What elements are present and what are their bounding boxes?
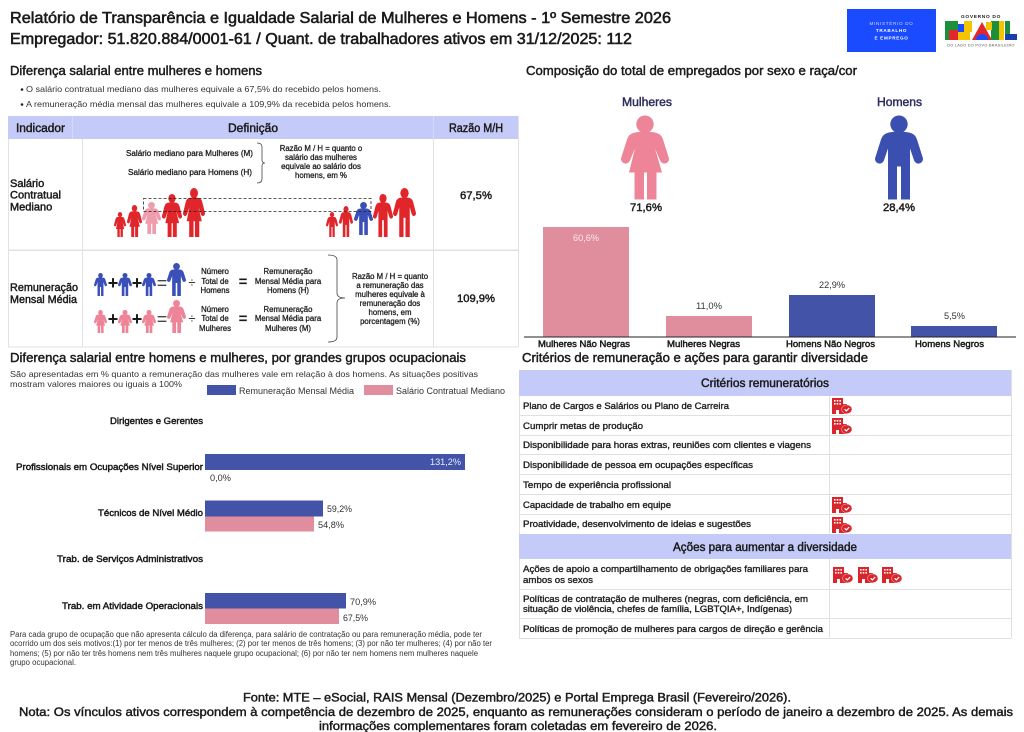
header: remuneration criteria: Critérios remuneratórios (701, 378, 829, 390)
formula: women average: Mensal Média para (255, 314, 322, 323)
brace and average ratio definition: remuneração dos (360, 299, 420, 308)
occupational groups explanation: São apresentadas em % quanto a remuneração das mulheres vale em relação à dos homens. As situações positivas (10, 369, 478, 379)
criteria rows: Disponibilidade de pessoa em ocupações específicas (523, 460, 754, 470)
value labels (210, 457, 462, 624)
men pictogram: Homens (877, 97, 922, 109)
bar: Mulheres Não Negras: 60,6% (573, 233, 600, 244)
table header: Definição (228, 123, 278, 135)
median salary definition text: Salário mediano para Homens (H) (128, 168, 252, 177)
value labels: 70,9% (350, 597, 377, 608)
bar: Mulheres Negras: 11,0% (696, 301, 723, 312)
median salary definition text (126, 143, 363, 183)
criteria rows: Plano de Cargos e Salários ou Plano de Carreira (523, 401, 729, 411)
heading: salary difference: Diferença salarial entre mulheres e homens (10, 64, 262, 78)
brace and average ratio definition: a remuneração das (356, 281, 424, 290)
heading: occupational groups: Diferença salarial entre homens e mulheres, por grandes grupos ocupacionais (10, 350, 467, 365)
formula: men average: ÷ (188, 275, 196, 290)
header: diversity actions: Ações para aumentar a diversidade (673, 542, 857, 554)
formula: men average: + (132, 273, 142, 293)
formula: men average: Total de (201, 277, 229, 286)
formula: women average: + (108, 309, 118, 329)
men pictogram: 28,4% (883, 202, 915, 214)
formula: men average: Mensal Média para (255, 277, 322, 286)
column chart: sex and race composition (524, 227, 1016, 349)
diversity action rows: situação de violência, chefes de família, LGBTQIA+, Indígenas) (523, 604, 792, 614)
dashed median connector (144, 198, 371, 212)
footer: source and note (19, 690, 1013, 732)
value: average ratio: 109,9% (457, 293, 495, 305)
footer: source and note: Nota: Os vínculos ativos correspondem à competência de dezembro de 2025, enquanto as remunerações consideram o período de janeiro a dezembro de 2025. As demais (19, 705, 1013, 719)
logo: Governo do Brasil: DO LADO DO POVO BRASILEIRO (947, 44, 1015, 48)
report title: Empregador: 51.820.884/0001-61 / Quant. de trabalhadores ativos em 31/12/2025: 112 (10, 31, 632, 48)
group labels (16, 416, 204, 611)
criteria rows: Proatividade, desenvolvimento de ideias e sugestões (523, 519, 752, 529)
footnote: missing data reasons: Para cada grupo de ocupação que não apresenta cálculo da diferença, para salário de contratação ou para remuneração média, pode ter (10, 630, 482, 639)
chart legend: Remuneração Mensal Média (239, 386, 354, 396)
criteria rows (523, 401, 812, 529)
panel: indicator table (8, 116, 519, 348)
logo: Governo do Brasil: GOVERNO DO (961, 14, 1001, 20)
formula: women average: Mulheres (M) (265, 324, 311, 333)
median salary definition text: Salário mediano para Mulheres (M) (126, 149, 253, 158)
panel: criteria and diversity table (519, 370, 1012, 639)
row label: Remuneração Mensal Média: Mensal Média (10, 294, 78, 306)
table header (8, 116, 518, 139)
chart legend (207, 385, 505, 396)
women pictogram: Mulheres (622, 97, 672, 109)
logo: Ministério do Trabalho e Emprego: TRABALHO (876, 28, 907, 33)
footnote: missing data reasons (10, 630, 492, 667)
criteria rows: Capacidade de trabalho em equipe (523, 500, 671, 510)
diversity action rows: Políticas de promoção de mulheres para cargos de direção e gerência (523, 624, 823, 634)
formula: women average: Total de (201, 314, 229, 323)
formula: women average: Mulheres (199, 324, 231, 333)
bar: Homens Não Negros: 22,9% (819, 280, 846, 291)
logo: Ministério do Trabalho e Emprego: MINISTÉRIO DO (869, 20, 914, 26)
formula: men average: Número (201, 267, 230, 276)
formula: men average: = (157, 273, 167, 293)
chart legend: Salário Contratual Mediano (396, 386, 505, 396)
report title: Relatório de Transparência e Igualdade Salarial de Mulheres e Homens - 1º Semestre 2026 (10, 10, 671, 27)
bar: Homens Negros (911, 311, 997, 349)
group labels: Técnicos de Nível Médio (98, 508, 203, 518)
group labels: Trab. em Atividade Operacionais (62, 601, 204, 611)
value labels: 0,0% (210, 473, 232, 484)
median salary definition text: homens, em % (295, 171, 347, 180)
formula: men average: + (108, 273, 118, 293)
footnote: missing data reasons: grupo ocupacional. (10, 658, 76, 667)
bar chart: occupational groups (16, 416, 465, 624)
footnote: missing data reasons: ocorrido um dos seis motivos:(1) por ter menos de três mulheres; (2) por ter menos de três homens; (3) por não ter mulheres; (4) por não ter (10, 639, 492, 648)
value labels: 59,2% (327, 504, 353, 515)
logo: Governo do Brasil (945, 14, 1017, 48)
heading: criteria and actions: Critérios de remuneração e ações para garantir diversidade (522, 351, 868, 365)
median salary definition text: salário das mulheres (285, 153, 357, 162)
bar: Homens Não Negros (786, 280, 876, 349)
row label: Remuneração Mensal Média (10, 282, 78, 306)
summary bullets (21, 84, 391, 109)
men pictogram (875, 97, 923, 214)
heading: composition: Composição do total de empregados por sexo e raça/cor (526, 64, 857, 78)
row label: Remuneração Mensal Média: Remuneração (10, 282, 78, 294)
formula: men average: Homens (H) (267, 286, 309, 295)
header: remuneration criteria (519, 370, 1011, 396)
row label: Salário Contratual Mediano: Salário (10, 178, 44, 190)
brace and average ratio definition (328, 255, 429, 342)
formula: women average: = (239, 310, 248, 328)
footer: source and note: Fonte: MTE – eSocial, RAIS Mensal (Dezembro/2025) e Portal Emprega Brasil (Fevereiro/2026). (243, 690, 791, 704)
value: median ratio: 67,5% (460, 190, 492, 202)
summary bullets: O salário contratual mediano das mulheres equivale a 67,5% do recebido pelos homens. (26, 84, 381, 94)
median salary definition text: Razão M / H = quanto o (280, 144, 363, 153)
diversity action rows: Ações de apoio a compartilhamento de obrigações familiares para (523, 564, 808, 574)
value labels: 67,5% (343, 613, 369, 624)
header: diversity actions (519, 534, 1011, 559)
footnote: missing data reasons: homens; (5) por não ter três homens nem três mulheres naquele grupo ocupacional; (6) por não ter nem homens nem mulheres naquele (10, 649, 479, 658)
formula: women average: Número (201, 305, 230, 314)
brace and average ratio definition: mulheres equivale à (355, 290, 426, 299)
formula: women average: Remuneração (264, 305, 313, 314)
bar: Homens Negros: Homens Negros (915, 339, 985, 349)
row label: Salário Contratual Mediano (10, 178, 61, 214)
bar: Homens Negros: 5,5% (944, 311, 966, 322)
formula: men average: Remuneração (264, 267, 313, 276)
report title (10, 10, 671, 48)
criteria company icons (832, 398, 852, 533)
women pictogram (621, 97, 672, 214)
group labels: Dirigentes e Gerentes (110, 416, 204, 426)
formula: women average: = (157, 309, 167, 329)
row label: Salário Contratual Mediano: Contratual (10, 190, 61, 202)
bar: Mulheres Não Negras (538, 227, 631, 349)
formula: men average: = (239, 274, 248, 290)
value labels: 54,8% (318, 520, 345, 531)
value labels: 131,2% (430, 457, 462, 468)
brace and average ratio definition: Razão M / H = quanto (352, 272, 429, 281)
women pictogram: 71,6% (630, 202, 662, 214)
diversity company icons (833, 567, 902, 583)
formula: women average: ÷ (188, 311, 196, 326)
diversity action rows: Políticas de contratação de mulheres (negras, com deficiência, em (523, 594, 808, 604)
row label: Salário Contratual Mediano: Mediano (10, 202, 52, 214)
table header: Indicador (16, 123, 65, 135)
bar: Mulheres Negras: Mulheres Negras (667, 339, 741, 349)
icon group: women salary ordering (114, 188, 205, 237)
diversity action rows (523, 564, 823, 634)
criteria rows: Disponibilidade para horas extras, reuniões com clientes e viagens (523, 440, 812, 450)
criteria rows: Cumprir metas de produção (523, 421, 643, 431)
table header: Razão M/H (449, 123, 503, 135)
formula: women average: + (132, 309, 142, 329)
logo: Ministério do Trabalho e Emprego (847, 9, 936, 52)
formula: women average (94, 300, 322, 333)
formula: men average: Homens (200, 286, 230, 295)
bar: Mulheres Não Negras: Mulheres Não Negras (538, 339, 631, 349)
summary bullets: A remuneração média mensal das mulheres equivale a 109,9% da recebida pelos homens. (26, 99, 391, 109)
occupational groups explanation: mostram valores maiores ou iguais a 100% (10, 379, 182, 389)
bar: Mulheres Negras (666, 301, 752, 349)
brace and average ratio definition: homens, em (369, 308, 411, 317)
diversity action rows: ambos os sexos (523, 575, 594, 585)
group labels: Profissionais em Ocupações Nível Superior (16, 462, 203, 472)
logo: Ministério do Trabalho e Emprego: E EMPREGO (874, 36, 909, 40)
group labels: Trab. de Serviços Administrativos (57, 554, 204, 564)
median salary definition text: equivale ao salário dos (281, 162, 361, 171)
occupational groups explanation (10, 369, 478, 389)
formula: men average (94, 263, 322, 296)
bar: Homens Não Negros: Homens Não Negros (786, 339, 876, 349)
icon group: men salary ordering (326, 188, 416, 237)
criteria rows: Tempo de experiência profissional (523, 480, 671, 490)
brace and average ratio definition: porcentagem (%) (360, 317, 420, 326)
bars (205, 454, 465, 624)
